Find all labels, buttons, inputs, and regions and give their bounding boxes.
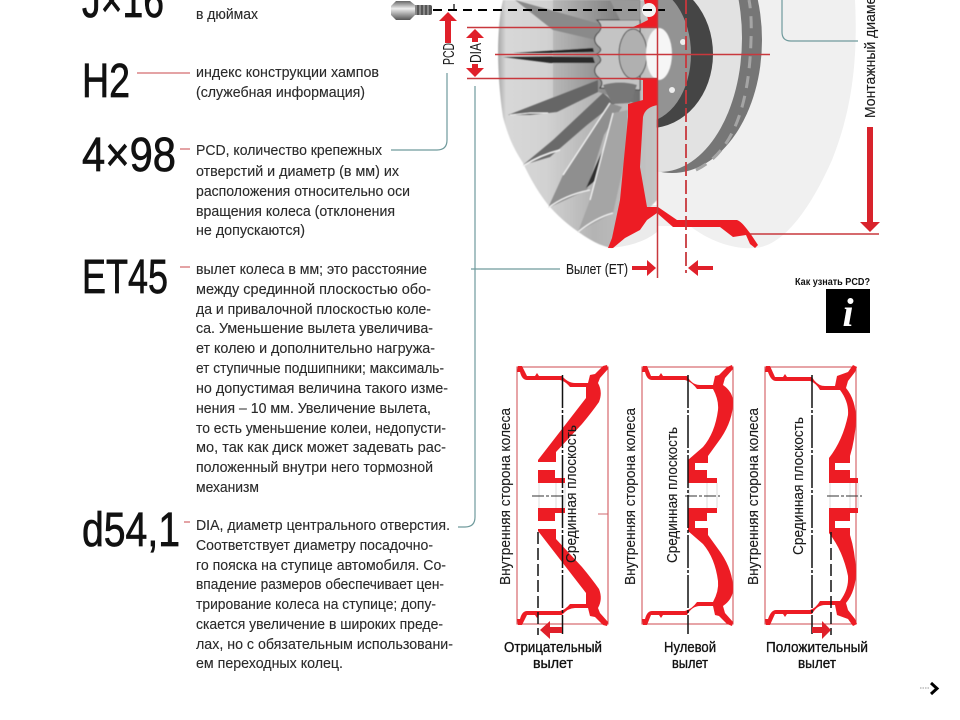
spec H2: H2 — [82, 55, 130, 108]
spec ET45: положенный внутри него тормозной — [196, 459, 433, 476]
spec H2: (служебная информация) — [196, 84, 365, 101]
spec ET45: ет колею и дополнительно нагружа- — [196, 340, 435, 357]
spec 4×98 PCD — [82, 129, 410, 239]
spec ET45: механизм — [196, 479, 259, 496]
spec J×16: в дюймах — [196, 6, 258, 23]
spec 4×98 PCD: вращения колеса (отклонения — [196, 203, 395, 220]
spec ET45: нения – 10 мм. Увеличение вылета, — [196, 400, 431, 417]
diagram: zero offset: Внутренняя сторона колеса — [622, 407, 639, 585]
spec ET45: са. Уменьшение вылета увеличива- — [196, 320, 433, 337]
diagram: positive offset: Положительный — [766, 639, 868, 656]
brake disc — [656, 0, 762, 173]
info callout: how to find PCD: Как узнать PCD? — [795, 276, 870, 288]
label: offset ET: Вылет (ET) — [566, 261, 628, 278]
DIA arrows and label: DIA — [468, 43, 485, 63]
spec 4×98 PCD: расположения относительно оси — [196, 183, 410, 200]
spec H2: индекс конструкции хампов — [196, 64, 379, 81]
spec 4×98 PCD: 4×98 — [82, 129, 176, 182]
mounting diameter arrow — [860, 127, 880, 232]
spec H2 — [82, 55, 379, 108]
diagram: zero offset: Нулевой — [664, 639, 716, 656]
wheel cutaway illustration — [498, 0, 856, 248]
spec 4×98 PCD: PCD, количество крепежных — [196, 142, 382, 159]
info callout: how to find PCD: i — [842, 290, 854, 335]
silver wheel face — [498, 0, 657, 248]
diagram: negative offset: Внутренняя сторона колеса — [497, 407, 514, 585]
diagram: zero offset — [622, 365, 733, 672]
PCD arrow and label — [439, 12, 458, 65]
spec ET45: между срединной плоскостью обо- — [196, 281, 431, 298]
diagram: positive offset: Срединная плоскость — [790, 417, 807, 555]
diagram: positive offset — [745, 365, 868, 672]
PCD arrow and label: PCD — [441, 43, 458, 65]
spec ET45 — [82, 251, 448, 496]
spec d54,1 DIA: Соответствует диаметру посадочно- — [196, 537, 433, 554]
spec ET45: ет ступичные подшипники; максималь- — [196, 360, 444, 377]
spokes — [503, 0, 640, 232]
spec d54,1 DIA — [82, 504, 453, 672]
next page arrow — [920, 683, 937, 694]
spec d54,1 DIA: го пояска на ступице автомобиля. Со- — [196, 557, 446, 574]
wheel rim back, pale — [655, 0, 856, 248]
dimension lines — [433, 0, 879, 278]
diagram: negative offset: Отрицательный — [504, 639, 602, 656]
diagram: negative offset — [497, 365, 608, 672]
spec d54,1 DIA: ем переходных колец. — [196, 655, 343, 672]
spec d54,1 DIA: трирование колеса на ступице; допу- — [196, 596, 436, 613]
diagram: positive offset: Внутренняя сторона колеса — [745, 407, 762, 585]
spec ET45: вылет колеса в мм; это расстояние — [196, 261, 427, 278]
diagram: negative offset: Срединная плоскость — [563, 425, 580, 563]
spec d54,1 DIA: лах, но с обязательным использовани- — [196, 636, 453, 653]
spec ET45: мо, так как диск может задевать рас- — [196, 439, 446, 456]
spec d54,1 DIA: впадение размеров обеспечивает цен- — [196, 576, 444, 593]
spec ET45: то есть уменьшение колеи, недопусти- — [196, 420, 446, 437]
spec 4×98 PCD: не допускаются) — [196, 222, 305, 239]
bolt icon — [391, 1, 432, 20]
spec ET45: но допустимая величина такого изме- — [196, 380, 448, 397]
offset arrows — [632, 260, 713, 276]
DIA arrows and label — [466, 29, 485, 77]
spec d54,1 DIA: скается увеличение в широких преде- — [196, 616, 443, 633]
teal leader lines — [391, 0, 858, 527]
red wheel cross-section — [608, 79, 758, 248]
spec J×16 — [82, 0, 258, 28]
diagram: negative offset: вылет — [533, 655, 573, 672]
spec 4×98 PCD: отверстий и диаметр (в мм) их — [196, 163, 399, 180]
spec ET45: да и привалочной плоскостью коле- — [196, 301, 431, 318]
spec d54,1 DIA: DIA, диаметр центрального отверстия. — [196, 517, 450, 534]
bolt hole — [642, 3, 656, 17]
rim pale lower lip — [608, 205, 657, 248]
spec ET45: ET45 — [82, 251, 168, 304]
diagram: positive offset: вылет — [798, 655, 836, 672]
hub centre — [595, 0, 672, 104]
spec d54,1 DIA: d54,1 — [82, 504, 180, 557]
diagram: zero offset: Срединная плоскость — [664, 427, 681, 563]
diagram: zero offset: вылет — [672, 655, 708, 672]
red section upper block — [633, 0, 658, 27]
info callout: how to find PCD — [795, 276, 870, 335]
